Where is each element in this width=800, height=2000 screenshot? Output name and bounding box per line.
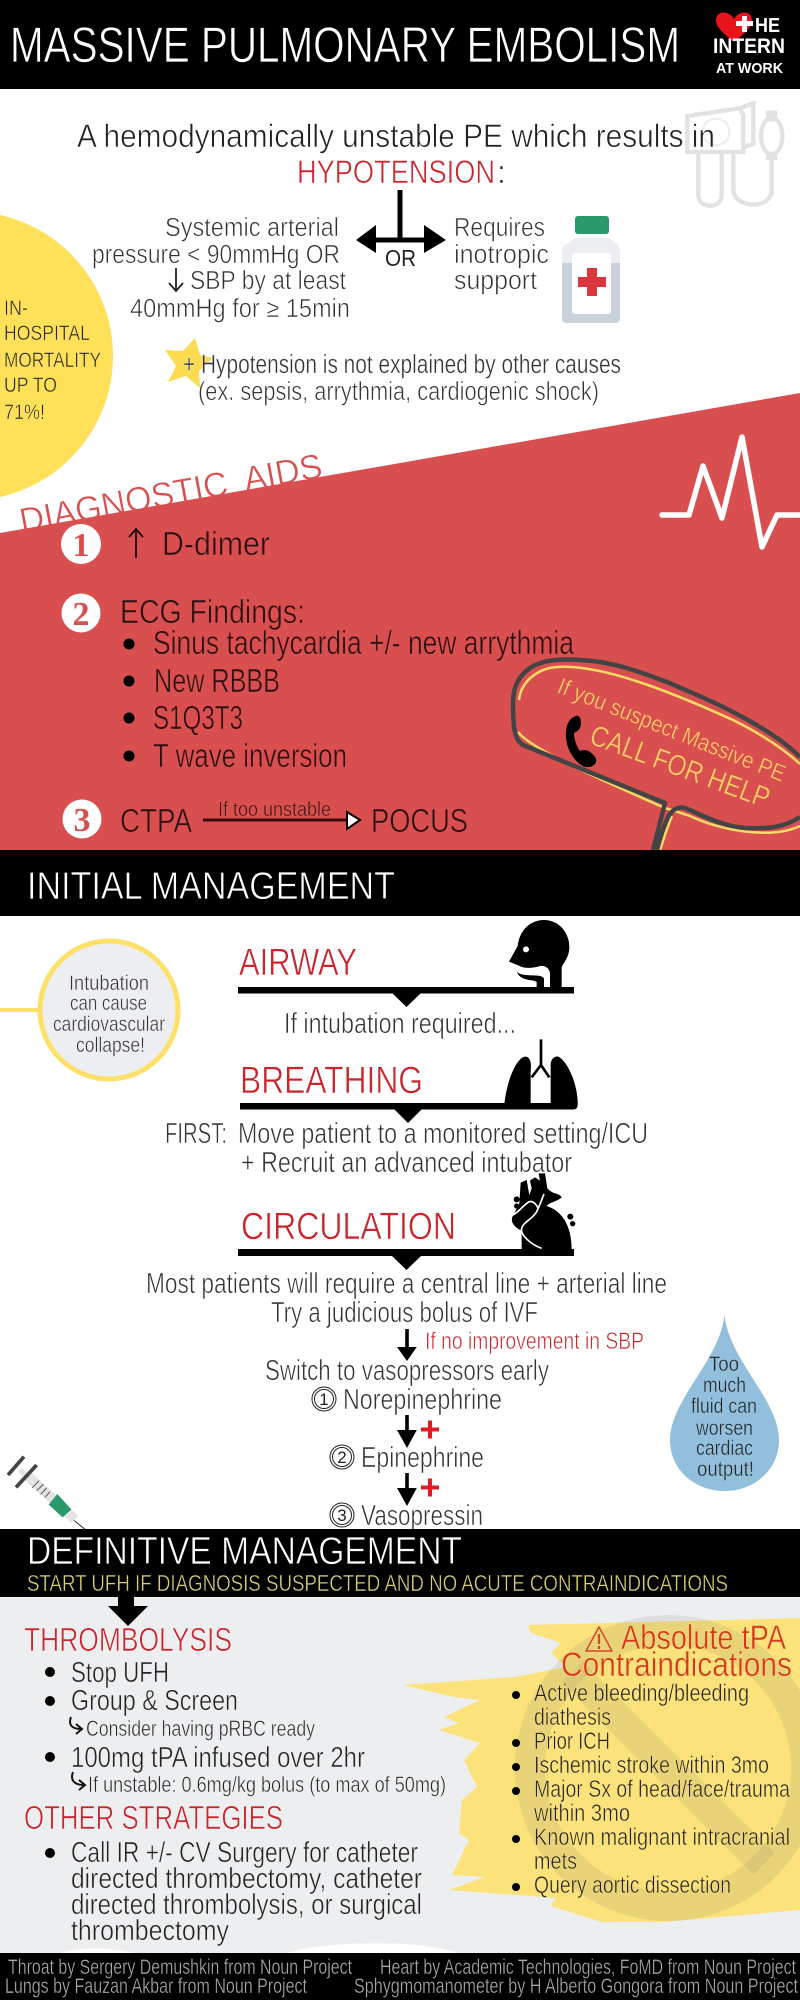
arrow: add third agent bbox=[397, 1473, 439, 1506]
yellow brush stroke bbox=[403, 1618, 800, 1922]
callout: in-hospital mortality: HOSPITAL bbox=[4, 322, 90, 345]
item 1: d-dimer: 1 bbox=[72, 527, 90, 564]
item 2: ECG findings bbox=[62, 593, 575, 774]
thrombolysis list: Group & Screen bbox=[71, 1685, 238, 1717]
item 3: CTPA or POCUS: POCUS bbox=[371, 802, 468, 839]
heading: absolute tPA contraindications bbox=[561, 1619, 792, 1684]
hypotension heading: HYPOTENSION bbox=[297, 154, 495, 190]
thrombolysis list: If unstable: 0.6mg/kg bolus (to max of 50mg) bbox=[88, 1772, 446, 1797]
callout: intubation warning: Intubation bbox=[69, 972, 149, 995]
icon: anatomical heart bbox=[512, 1173, 575, 1249]
step 1: norepinephrine: Norepinephrine bbox=[343, 1384, 502, 1416]
item 3: CTPA or POCUS: 3 bbox=[74, 802, 90, 839]
panel: diagnostic aids bbox=[0, 393, 800, 850]
step 2: epinephrine bbox=[330, 1442, 484, 1474]
breathing section: FIRST: bbox=[165, 1118, 227, 1150]
contraindications list: Query aortic dissection bbox=[534, 1872, 731, 1899]
definition text: A hemodynamically unstable PE which results in bbox=[77, 118, 715, 154]
callout: in-hospital mortality: 71%! bbox=[4, 401, 45, 424]
item 1: d-dimer: D-dimer bbox=[162, 525, 270, 562]
definition text: : bbox=[497, 154, 506, 190]
text: hypotension exclusion note bbox=[183, 351, 621, 406]
breathing section: BREATHING bbox=[240, 1060, 423, 1102]
thrombolysis list: 100mg tPA infused over 2hr bbox=[71, 1742, 365, 1774]
breathing section: Move patient to a monitored setting/ICU bbox=[238, 1118, 648, 1150]
logo: the intern at work: HE bbox=[755, 15, 780, 37]
callout: fluid warning drop bbox=[670, 1315, 779, 1491]
circulation section: Most patients will require a central line + arterial line bbox=[146, 1268, 667, 1300]
other strategies list bbox=[45, 1837, 422, 1947]
arrow: down into thrombolysis bbox=[108, 1597, 148, 1626]
item 3: CTPA or POCUS: CTPA bbox=[120, 802, 192, 839]
contraindications list bbox=[512, 1680, 790, 1899]
contraindications list: mets bbox=[534, 1848, 577, 1875]
icon: telephone bbox=[566, 716, 596, 767]
text: hypotension exclusion note: (ex. sepsis, arrythmia, cardiogenic shock) bbox=[198, 378, 599, 406]
callout: fluid warning drop: much bbox=[703, 1374, 746, 1397]
text: blood pressure criterion: pressure < 90mmHg OR bbox=[92, 241, 340, 269]
circulation section: Try a judicious bolus of IVF bbox=[271, 1297, 538, 1329]
footer: icon credits: Throat by Sergery Demushkin from Noun Project bbox=[8, 1956, 352, 1979]
callout: intubation warning: cardiovascular bbox=[53, 1013, 165, 1036]
text: blood pressure criterion bbox=[92, 214, 350, 323]
heading: diagnostic aids: DIAGNOSTIC AIDS bbox=[16, 447, 325, 541]
step 1: norepinephrine: 1 bbox=[319, 1390, 329, 1409]
callout: fluid warning drop: worsen bbox=[695, 1417, 753, 1440]
circulation section bbox=[146, 1173, 667, 1532]
circulation section: CIRCULATION bbox=[241, 1206, 456, 1248]
thrombolysis list: Consider having pRBC ready bbox=[86, 1716, 316, 1741]
icon: lungs bbox=[504, 1039, 578, 1109]
callout: in-hospital mortality: MORTALITY bbox=[4, 349, 101, 372]
logo: the intern at work: AT WORK bbox=[716, 60, 783, 77]
text: inotropic support criterion bbox=[454, 214, 549, 295]
thrombolysis list: Stop UFH bbox=[71, 1657, 169, 1689]
other strategies list: directed thrombolysis, or surgical bbox=[71, 1889, 422, 1921]
step 1: norepinephrine bbox=[312, 1384, 502, 1416]
circulation section: If no improvement in SBP bbox=[425, 1328, 644, 1355]
icon: head and throat bbox=[509, 920, 569, 987]
callout: in-hospital mortality: UP TO bbox=[4, 374, 57, 397]
callout: fluid warning drop: fluid can bbox=[691, 1395, 757, 1418]
step 2: epinephrine: 2 bbox=[337, 1448, 347, 1467]
callout: fluid warning drop: output! bbox=[697, 1458, 754, 1481]
item 3: CTPA or POCUS bbox=[62, 799, 468, 839]
item 2: ECG findings: New RBBB bbox=[154, 662, 280, 699]
icon: syringe bbox=[8, 1457, 85, 1529]
airway section bbox=[238, 920, 574, 1040]
contraindications list: Prior ICH bbox=[534, 1728, 610, 1755]
footer: icon credits bbox=[0, 1953, 800, 2000]
arrow: branching OR arrow: OR bbox=[385, 245, 416, 271]
section bar: definitive management: DEFINITIVE MANAGEMENT bbox=[27, 1530, 462, 1573]
icon: medicine bottle bbox=[562, 216, 620, 323]
callout: intubation warning bbox=[0, 941, 178, 1079]
text: hypotension exclusion note: + Hypotension is not explained by other causes bbox=[183, 351, 621, 379]
callout: call for help speech bubble bbox=[513, 660, 800, 850]
callout: in-hospital mortality bbox=[0, 212, 113, 500]
breathing section bbox=[165, 1039, 648, 1179]
no symbol bbox=[530, 1630, 800, 1906]
item 3: CTPA or POCUS: If too unstable bbox=[218, 799, 331, 821]
step 3: vasopressin: Vasopressin bbox=[361, 1500, 483, 1532]
text: inotropic support criterion: support bbox=[454, 267, 537, 295]
item 2: ECG findings: T wave inversion bbox=[153, 737, 347, 774]
airway section: AIRWAY bbox=[239, 942, 357, 984]
step 3: vasopressin bbox=[330, 1500, 483, 1532]
header banner bbox=[0, 0, 800, 89]
contraindications list: within 3mo bbox=[533, 1800, 630, 1827]
heading: other strategies: OTHER STRATEGIES bbox=[24, 1799, 283, 1836]
item 2: ECG findings: ECG Findings: bbox=[120, 593, 305, 630]
footer: icon credits: Lungs by Fauzan Akbar from Noun Project bbox=[5, 1975, 307, 1998]
contraindications list: Active bleeding/bleeding bbox=[534, 1680, 749, 1707]
item 1: d-dimer bbox=[61, 524, 270, 564]
icon: sphygmomanometer bbox=[687, 103, 782, 206]
section bar: initial management bbox=[0, 850, 800, 916]
text: blood pressure criterion: Systemic arterial bbox=[165, 214, 339, 242]
item 2: ECG findings: Sinus tachycardia +/- new arrythmia bbox=[153, 624, 575, 661]
item 2: ECG findings: S1Q3T3 bbox=[153, 699, 243, 736]
step 3: vasopressin: 3 bbox=[337, 1506, 347, 1525]
arrow: add second agent bbox=[397, 1415, 439, 1448]
thrombolysis list bbox=[45, 1657, 446, 1797]
step 2: epinephrine: Epinephrine bbox=[361, 1442, 484, 1474]
contraindications list: diathesis bbox=[534, 1704, 611, 1731]
other strategies list: Call IR +/- CV Surgery for catheter bbox=[71, 1837, 418, 1869]
callout: in-hospital mortality: IN- bbox=[4, 297, 28, 320]
section bar: definitive management bbox=[0, 1529, 800, 1597]
heading: thrombolysis: THROMBOLYSIS bbox=[24, 1621, 232, 1658]
icon: yellow star bbox=[165, 338, 213, 388]
text: blood pressure criterion: SBP by at least bbox=[190, 267, 346, 295]
airway section: If intubation required... bbox=[284, 1008, 516, 1040]
panel: definitive management bbox=[0, 1597, 800, 1953]
callout: intubation warning: collapse! bbox=[76, 1034, 145, 1057]
section bar: initial management: INITIAL MANAGEMENT bbox=[27, 865, 395, 908]
circulation section: Switch to vasopressors early bbox=[265, 1355, 549, 1387]
callout: fluid warning drop: cardiac bbox=[696, 1437, 753, 1460]
other strategies list: thrombectomy bbox=[71, 1915, 229, 1947]
breathing section: + Recruit an advanced intubator bbox=[241, 1147, 572, 1179]
callout: fluid warning drop: Too bbox=[709, 1353, 739, 1376]
callout: intubation warning: can cause bbox=[70, 992, 147, 1015]
text: inotropic support criterion: Requires bbox=[454, 214, 545, 242]
logo: the intern at work bbox=[713, 12, 785, 77]
text: blood pressure criterion: 40mmHg for ≥ 15min bbox=[130, 295, 350, 323]
other strategies list: directed thrombectomy, catheter bbox=[71, 1863, 422, 1895]
icon: ECG trace bbox=[662, 437, 800, 547]
definition text bbox=[77, 118, 715, 190]
item 2: ECG findings: 2 bbox=[72, 596, 90, 633]
logo: the intern at work: INTERN bbox=[713, 35, 785, 58]
arrow: to vasopressors bbox=[397, 1329, 417, 1361]
text: inotropic support criterion: inotropic bbox=[454, 241, 549, 269]
arrow: branching OR arrow bbox=[356, 190, 446, 271]
